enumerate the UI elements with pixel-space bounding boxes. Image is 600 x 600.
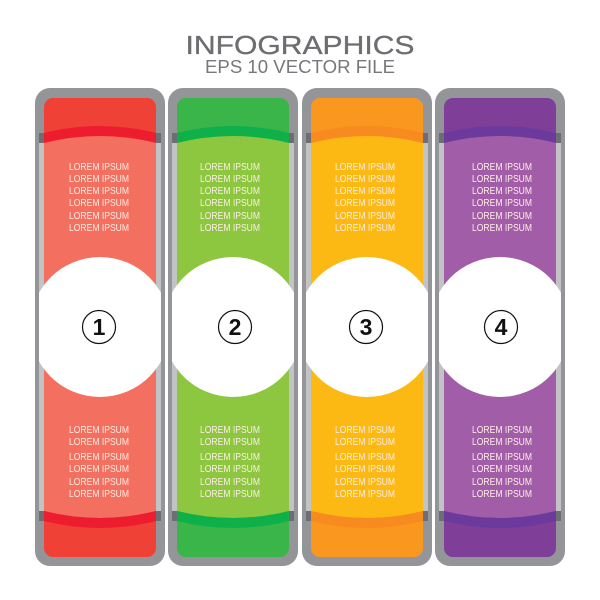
number badge 4: 4 xyxy=(495,314,508,340)
number badge 3: 3 xyxy=(360,314,372,340)
text block: column 4 top xyxy=(472,162,532,234)
text block: column 4 top: LOREM IPSUM xyxy=(472,223,532,234)
text block: column 3 bottom: LOREM IPSUM xyxy=(335,464,395,475)
text block: column 4 bottom xyxy=(472,425,532,500)
text block: column 4 top: LOREM IPSUM xyxy=(472,162,532,173)
text block: column 3 top: LOREM IPSUM xyxy=(335,162,395,173)
text block: column 3 top xyxy=(335,162,395,234)
text block: column 4 bottom: LOREM IPSUM xyxy=(472,489,532,500)
number badge 4 xyxy=(484,310,518,344)
text block: column 1 bottom: LOREM IPSUM xyxy=(69,489,129,500)
panel: column 2 green xyxy=(163,88,303,566)
text block: column 4 bottom: LOREM IPSUM xyxy=(472,437,532,448)
text block: column 4 top: LOREM IPSUM xyxy=(472,186,532,197)
text block: column 2 bottom: LOREM IPSUM xyxy=(200,425,260,436)
text block: column 2 bottom: LOREM IPSUM xyxy=(200,464,260,475)
text block: column 2 bottom: LOREM IPSUM xyxy=(200,477,260,488)
text block: column 3 top: LOREM IPSUM xyxy=(335,186,395,197)
text block: column 1 top: LOREM IPSUM xyxy=(69,162,129,173)
text block: column 1 bottom xyxy=(69,425,129,500)
white circle 3 xyxy=(306,257,428,397)
white circle 1 xyxy=(39,257,161,397)
text block: column 2 bottom: LOREM IPSUM xyxy=(200,452,260,463)
number badge 1: 1 xyxy=(93,314,106,340)
panel: column 3 orange xyxy=(297,88,437,566)
number badge 1 xyxy=(82,310,116,344)
text block: column 2 top: LOREM IPSUM xyxy=(200,174,260,185)
text block: column 4 bottom: LOREM IPSUM xyxy=(472,477,532,488)
text block: column 4 top: LOREM IPSUM xyxy=(472,198,532,209)
text block: column 2 bottom: LOREM IPSUM xyxy=(200,489,260,500)
text block: column 3 bottom: LOREM IPSUM xyxy=(335,489,395,500)
number badge 2 xyxy=(218,310,252,344)
text block: column 3 bottom: LOREM IPSUM xyxy=(335,425,395,436)
text block: column 3 top: LOREM IPSUM xyxy=(335,223,395,234)
text block: column 1 top: LOREM IPSUM xyxy=(69,198,129,209)
text block: column 1 top xyxy=(69,162,129,234)
text block: column 2 top: LOREM IPSUM xyxy=(200,186,260,197)
panel: column 1 red xyxy=(30,88,170,566)
text block: column 1 bottom: LOREM IPSUM xyxy=(69,425,129,436)
text block: column 4 top: LOREM IPSUM xyxy=(472,174,532,185)
text block: column 2 top: LOREM IPSUM xyxy=(200,223,260,234)
white circle 2 xyxy=(172,257,294,397)
panel: column 4 purple xyxy=(430,88,570,566)
number badge 2: 2 xyxy=(229,314,241,340)
text block: column 1 top: LOREM IPSUM xyxy=(69,174,129,185)
text block: column 3 top: LOREM IPSUM xyxy=(335,198,395,209)
text block: column 1 bottom: LOREM IPSUM xyxy=(69,452,129,463)
text block: column 3 bottom xyxy=(335,425,395,500)
text block: column 2 top: LOREM IPSUM xyxy=(200,162,260,173)
text block: column 1 top: LOREM IPSUM xyxy=(69,186,129,197)
subtitle: EPS 10 VECTOR FILE xyxy=(205,56,395,77)
number badge 3 xyxy=(350,310,382,344)
text block: column 3 bottom: LOREM IPSUM xyxy=(335,452,395,463)
title: INFOGRAPHICS xyxy=(186,30,414,60)
text block: column 3 bottom: LOREM IPSUM xyxy=(335,477,395,488)
text block: column 2 top: LOREM IPSUM xyxy=(200,211,260,222)
text block: column 3 top: LOREM IPSUM xyxy=(335,174,395,185)
text block: column 3 top: LOREM IPSUM xyxy=(335,211,395,222)
text block: column 2 bottom: LOREM IPSUM xyxy=(200,437,260,448)
text block: column 4 bottom: LOREM IPSUM xyxy=(472,452,532,463)
text block: column 1 bottom: LOREM IPSUM xyxy=(69,477,129,488)
white circle 4 xyxy=(439,257,561,397)
text block: column 2 top xyxy=(200,162,260,234)
text block: column 4 top: LOREM IPSUM xyxy=(472,211,532,222)
text block: column 1 top: LOREM IPSUM xyxy=(69,223,129,234)
text block: column 4 bottom: LOREM IPSUM xyxy=(472,464,532,475)
text block: column 4 bottom: LOREM IPSUM xyxy=(472,425,532,436)
text block: column 1 bottom: LOREM IPSUM xyxy=(69,464,129,475)
text block: column 2 top: LOREM IPSUM xyxy=(200,198,260,209)
text block: column 3 bottom: LOREM IPSUM xyxy=(335,437,395,448)
text block: column 2 bottom xyxy=(200,425,260,500)
text block: column 1 bottom: LOREM IPSUM xyxy=(69,437,129,448)
text block: column 1 top: LOREM IPSUM xyxy=(69,211,129,222)
